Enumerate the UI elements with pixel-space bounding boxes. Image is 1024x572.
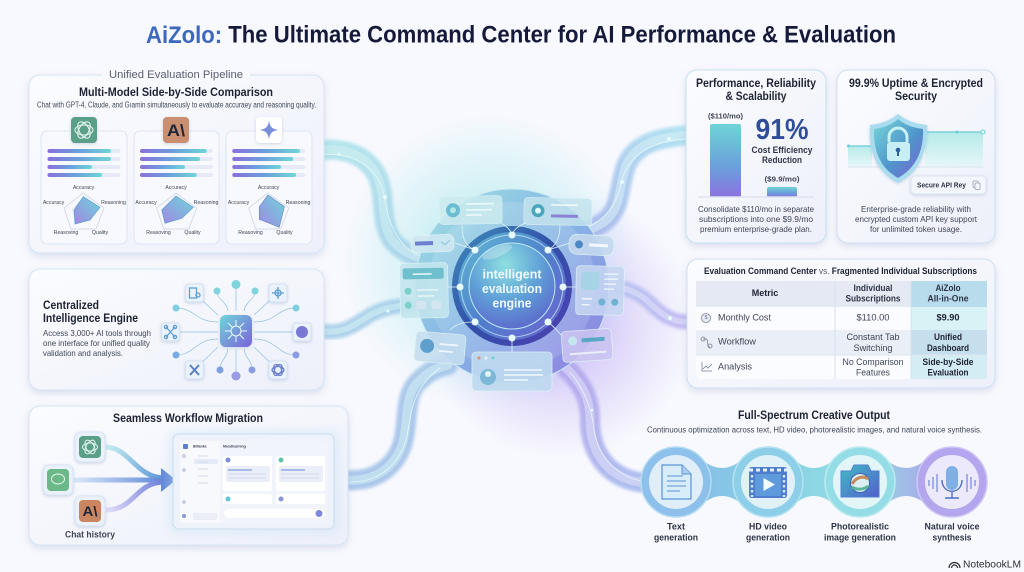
label: Photorealistic [831, 522, 889, 532]
description: Chat with GPT-4, Claude, and Gıamin simultaneously to evaluate accuraey and reasoning quality. [37, 100, 316, 110]
row: analysis: No Comparison [842, 357, 904, 367]
row: workflow: Dashboard [927, 343, 969, 353]
radar chart: Reasoving [54, 230, 78, 236]
icon: document [662, 465, 691, 499]
row: monthly cost: $ [704, 315, 708, 321]
description: Enterprise-grade reliability with [861, 204, 971, 214]
stream: performance panel to engine [588, 135, 688, 230]
output: image generation: image generation [824, 532, 896, 544]
stream: comparison panel to engine [322, 150, 422, 258]
description: validation and analysis. [43, 348, 123, 358]
radar chart: Quality [184, 230, 201, 236]
table heading: Evaluation Command Center vs. Fragmented Individual Subscriptions [704, 266, 977, 276]
model card: Claude [134, 117, 219, 244]
sphere label: intelligent [482, 266, 542, 282]
radar chart: Accuracy [73, 185, 95, 191]
stat: 91 percent: Cost Efficiency [752, 145, 813, 155]
stat: 91 percent [752, 114, 813, 165]
table header row: Subscriptions [846, 294, 900, 304]
heading [849, 78, 983, 103]
row: analysis: Side-by-Side [922, 357, 974, 367]
score bars [232, 149, 305, 177]
panel: comparison table [687, 259, 995, 388]
data streams connecting panels to engine [322, 135, 688, 483]
stat: 91 percent: Reduction [762, 155, 802, 165]
label: HD video [749, 522, 787, 532]
radar chart [43, 185, 126, 236]
label: Natural voice [924, 522, 980, 532]
stream: intelligence engine panel to engine [322, 305, 410, 332]
heading: Multi-Model Side-by-Side Comparison [79, 85, 273, 99]
heading: Centralized [43, 298, 99, 312]
dashboard mockup: Bitlanks [193, 444, 207, 448]
description: Continuous optimization across text, HD video, photorealistic images, and natural voice synthesis. [647, 426, 982, 434]
row: workflow: Constant Tab [846, 332, 900, 342]
output: image generation [824, 447, 896, 544]
stream: engine to creative output [566, 368, 660, 483]
hub diagram [162, 280, 311, 380]
radar chart: Accuracy [258, 185, 280, 191]
brand mark: NotebookLM: NotebookLM [963, 560, 1021, 570]
tool tiles [162, 284, 311, 379]
icon: microphone [929, 466, 975, 498]
description [698, 204, 814, 234]
pipeline label backing [102, 68, 250, 82]
heading: Seamless Workflow Migration [113, 411, 263, 425]
bar chart: cost comparison: ($9.9/mo) [764, 174, 800, 184]
description: encrypted custom API key support [855, 214, 978, 224]
radar chart: Reasoving [238, 230, 263, 236]
radar chart: Accuracy [228, 200, 250, 206]
radar chart: Accuracy [165, 185, 187, 191]
heading: Intelligence Engine [43, 311, 138, 325]
dashboard input [224, 509, 325, 518]
sphere label: evaluation [482, 281, 542, 296]
output: text generation: generation [654, 532, 698, 544]
sphere label: engine [492, 296, 532, 310]
panel: centralized intelligence engine [29, 269, 324, 390]
heading: Full-Spectrum Creative Output [738, 410, 890, 422]
stream: comparison table to engine [618, 287, 688, 322]
icon: Anthropic tile: A\ [82, 503, 98, 519]
row: monthly cost: Monthly Cost [718, 312, 771, 324]
title: AiZolo: The Ultimate Command Center for AI Performance & Evaluation [146, 22, 896, 48]
dark ring [452, 226, 572, 346]
icon: chat tile [43, 465, 73, 495]
uptime chart [847, 130, 985, 167]
radar chart: Reasoning [101, 200, 126, 206]
description: subscriptions into one $9.9/mo [699, 214, 813, 224]
stream nodes [338, 137, 672, 411]
description [855, 204, 978, 234]
row: analysis: Features [856, 368, 890, 378]
icon: Anthropic: A\ [167, 121, 185, 140]
panel: performance and scalability [686, 70, 826, 243]
row: analysis: Evaluation [928, 368, 968, 378]
description: for unlimited token usage. [870, 224, 962, 234]
row: workflow: Workflow [718, 336, 756, 348]
panel: seamless workflow migration [29, 406, 348, 545]
description: one interface for unified quality [43, 338, 151, 348]
icon: camera [841, 465, 879, 497]
row: workflow: Switching [854, 343, 892, 353]
connector lines [448, 222, 577, 354]
central glow [340, 112, 695, 460]
panel: multi-model comparison [29, 68, 324, 253]
icon: OpenAI tile [75, 432, 105, 462]
radar chart: Reasoning [286, 200, 311, 206]
central hub tile [220, 315, 252, 347]
sphere label [482, 266, 542, 310]
radar chart: Accuracy [43, 200, 65, 206]
row: monthly cost: $110.00 [856, 312, 890, 324]
icon: Gemini [256, 117, 282, 143]
row: workflow [701, 332, 969, 353]
callout: secure API key: Secure API Rey [917, 180, 967, 190]
tool glyphs [164, 287, 284, 377]
table header row [752, 283, 968, 304]
row: monthly cost [702, 312, 960, 324]
output: voice synthesis: synthesis [932, 532, 972, 544]
icon: shield with lock [870, 114, 927, 183]
stream: workflow panel to engine [346, 365, 448, 482]
icon: film clip [749, 467, 787, 498]
label: Text [667, 522, 686, 532]
icon: Anthropic tile [75, 496, 105, 526]
description: Consolidate $110/mo in separate [698, 204, 814, 214]
heading [696, 78, 817, 103]
radar chart [228, 185, 311, 236]
description [43, 328, 151, 358]
hub connector lines [170, 284, 302, 376]
merging arrows [74, 447, 176, 510]
table header row: Individual [854, 283, 892, 293]
table header row: Metric [752, 288, 778, 298]
hub glyph [225, 320, 247, 342]
radar chart: Quality [92, 230, 108, 236]
floating glass cards [400, 195, 624, 391]
radar chart: Reasoning [194, 200, 219, 206]
bar chart: cost comparison [698, 112, 814, 197]
engine orb [400, 189, 624, 391]
connecting necks [700, 458, 928, 506]
heading: 99.9% Uptime & Encrypted [849, 78, 983, 90]
description: Access 3,000+ AI tools through [43, 328, 151, 338]
outer disc [415, 189, 609, 383]
model card: Gemini [226, 117, 312, 244]
section: creative output [641, 410, 987, 544]
heading: Security [895, 91, 938, 103]
description: premium enterprise-grade plan. [700, 224, 812, 234]
score bars [48, 149, 120, 177]
panel: uptime and security [837, 70, 995, 243]
radar chart: Reasoving [146, 230, 171, 236]
glowing nodes [456, 232, 566, 342]
output: video generation [733, 447, 803, 544]
heading: Performance, Reliability [696, 78, 817, 90]
table grid [696, 281, 987, 379]
radar chart: Accuracy [135, 200, 157, 206]
dashboard mockup [168, 430, 340, 534]
icon: OpenAI [71, 117, 97, 143]
row: analysis: Analysis [718, 362, 752, 372]
output: voice synthesis [917, 447, 987, 544]
radar chart: Quality [276, 230, 293, 236]
bar chart: cost comparison: ($110/mo) [708, 112, 743, 120]
output: text generation [641, 447, 711, 544]
model card: GPT [41, 117, 127, 244]
label: chat history: Chat history [65, 530, 116, 540]
table header row: All-in-One [928, 294, 968, 304]
dashboard cards [223, 456, 325, 504]
row: monthly cost: $9.90 [936, 312, 960, 324]
stat: 91 percent: 91% [756, 114, 809, 146]
pipeline label: Unified Evaluation Pipeline [109, 69, 243, 81]
hub nodes [172, 280, 300, 380]
dashboard mockup: Mosdlearning [223, 444, 246, 448]
heading [43, 298, 138, 325]
score bars [140, 149, 213, 177]
callout: secure API key [911, 176, 986, 194]
output: video generation: generation [746, 532, 790, 544]
radar chart [135, 185, 219, 236]
table header row: AiZolo [936, 283, 961, 293]
row: workflow: Unified [934, 332, 962, 342]
central sphere [469, 243, 555, 329]
heading: & Scalability [726, 91, 787, 103]
row: analysis [702, 357, 974, 378]
